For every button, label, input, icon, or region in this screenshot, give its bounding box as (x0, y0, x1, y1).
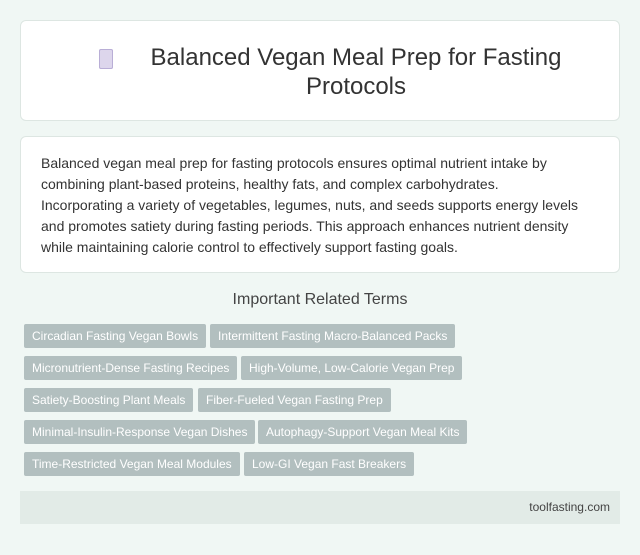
header panel (20, 20, 620, 121)
tag list: Micronutrient-Dense Fasting Recipes (32, 361, 229, 375)
description text: combining plant-based proteins, healthy fats, and complex carbohydrates. (41, 176, 499, 192)
title: Balanced Vegan Meal Prep for Fasting Protocols (151, 44, 561, 100)
tag list: Low-GI Vegan Fast Breakers (252, 457, 406, 471)
description text: while maintaining calorie control to effectively support fasting goals. (41, 239, 458, 255)
tag list (24, 324, 467, 476)
tag list: Intermittent Fasting Macro-Balanced Packs (218, 329, 447, 343)
tag list: Time-Restricted Vegan Meal Modules (32, 457, 232, 471)
icon: scroll (99, 49, 113, 69)
description panel (20, 136, 620, 273)
description text: and promotes satiety during fasting periods. This approach enhances nutrient density (41, 218, 568, 234)
tag list: High-Volume, Low-Calorie Vegan Prep (249, 361, 454, 375)
tag list: Minimal-Insulin-Response Vegan Dishes (32, 425, 247, 439)
description text (41, 155, 578, 255)
description text: Balanced vegan meal prep for fasting protocols ensures optimal nutrient intake by (41, 155, 547, 171)
heading: related terms: Important Related Terms (233, 291, 407, 308)
footer (20, 491, 620, 524)
tag list: Fiber-Fueled Vegan Fasting Prep (206, 393, 383, 407)
tag list: Circadian Fasting Vegan Bowls (32, 329, 198, 343)
footer source text: toolfasting.com (529, 500, 610, 514)
tag list: Satiety-Boosting Plant Meals (32, 393, 185, 407)
tag list: Autophagy-Support Vegan Meal Kits (266, 425, 459, 439)
description text: Incorporating a variety of vegetables, legumes, nuts, and seeds supports energy levels (41, 197, 578, 213)
